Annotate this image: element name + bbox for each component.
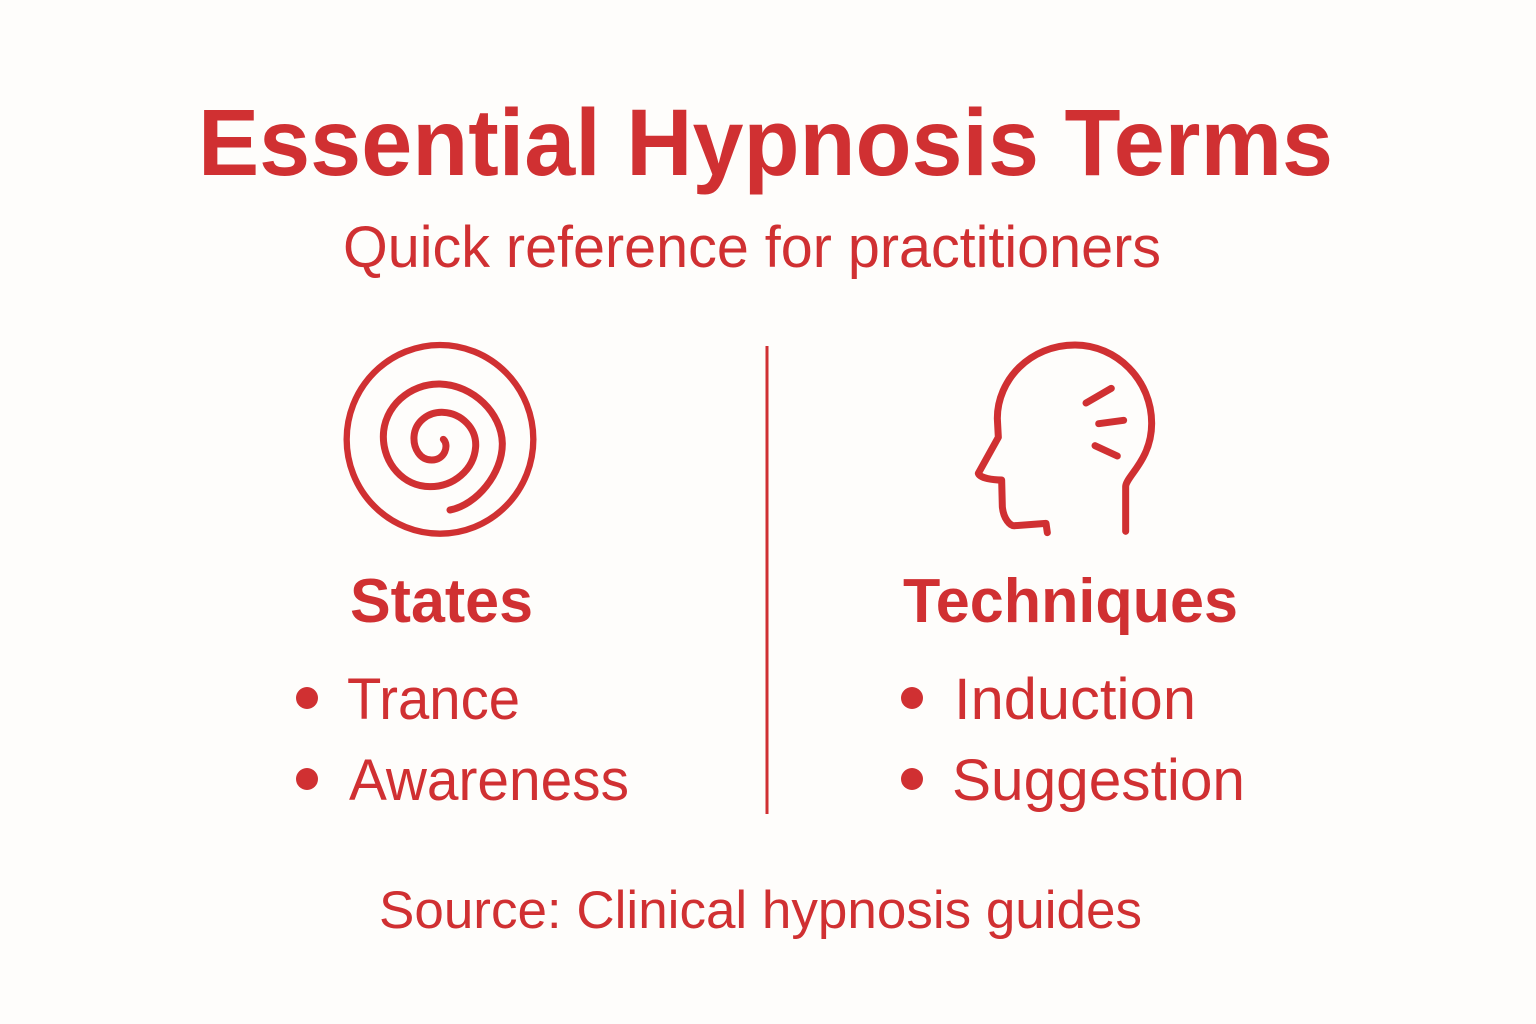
item: awareness: Awareness [349, 748, 629, 813]
list: techniques [901, 667, 1245, 813]
panel: techniques [901, 345, 1245, 813]
bullet [901, 687, 923, 709]
item: trance: Trance [347, 667, 520, 732]
bullet [901, 768, 923, 790]
title: Essential Hypnosis Terms [198, 90, 1333, 196]
source note: Source: Clinical hypnosis guides [379, 881, 1142, 940]
heading: techniques: Techniques [903, 567, 1238, 636]
item: suggestion: Suggestion [952, 748, 1245, 813]
item: induction: Induction [954, 667, 1196, 732]
heading: states: States [350, 567, 533, 636]
icon: head profile [978, 345, 1152, 533]
list: states [296, 667, 629, 813]
center divider [766, 346, 768, 814]
bullet [296, 687, 318, 709]
subtitle: Quick reference for practitioners [343, 215, 1161, 280]
panel: states [296, 345, 629, 813]
icon: spiral [347, 345, 533, 534]
bullet [296, 768, 318, 790]
